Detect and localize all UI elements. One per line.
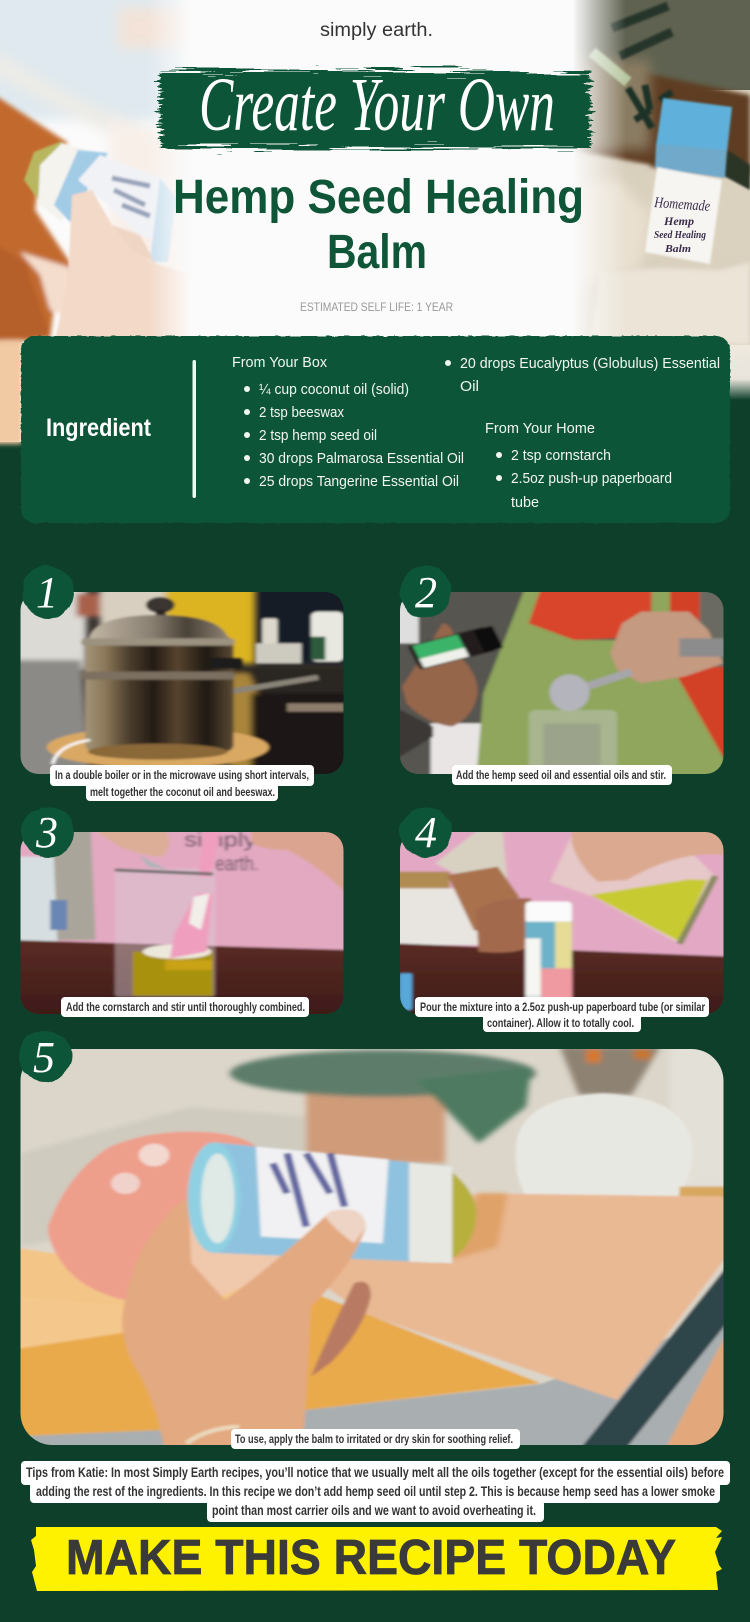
step 3 panel — [10, 806, 354, 1020]
step 3 badge: 3 — [35, 808, 58, 857]
main heading — [173, 171, 584, 279]
yellow brush strip — [31, 1527, 722, 1591]
step 5 caption: To use, apply the balm to irritated or dry skin for soothing relief. — [235, 1432, 513, 1446]
step 3 caption: Add the cornstarch and stir until thoroughly combined. — [66, 1000, 305, 1014]
main heading: Balm — [327, 226, 427, 279]
call to action text: MAKE THIS RECIPE TODAY — [66, 1531, 676, 1585]
tube in photo — [188, 1142, 476, 1263]
title banner — [160, 63, 590, 148]
tips from Katie: point than most carrier oils and we want to avoid overheating it. — [212, 1503, 536, 1518]
from your box list — [232, 354, 720, 490]
brush stroke — [160, 71, 590, 148]
step 1 caption: melt together the coconut oil and beeswax. — [90, 785, 275, 799]
hero tube handwriting — [653, 195, 711, 255]
step 3 badge — [22, 806, 74, 858]
step 4 panel — [392, 806, 732, 1032]
step 2 badge — [400, 566, 452, 618]
from your box list: ¼ cup coconut oil (solid) — [259, 381, 409, 398]
shelf life note: ESTIMATED SELF LIFE: 1 YEAR — [300, 300, 453, 314]
step 1 badge: 1 — [36, 568, 58, 617]
hero right photo — [565, 0, 750, 345]
step 2 caption — [452, 765, 672, 785]
step 1 panel — [10, 566, 354, 801]
step 3 photo: stirring in cornstarch — [20, 832, 344, 1014]
hero tube handwriting: Hemp — [663, 214, 694, 228]
step 5 caption — [231, 1429, 520, 1449]
hero tube handwriting: Balm — [664, 243, 691, 255]
step 1 caption — [50, 765, 314, 801]
divider — [192, 360, 196, 498]
step 4 badge — [400, 806, 452, 858]
step 3 photo: stirring in cornstarch: earth. — [215, 853, 258, 876]
from your box list: Oil — [460, 378, 479, 395]
step 4 badge: 4 — [415, 808, 437, 857]
step 3 photo: stirring in cornstarch: simply — [184, 829, 256, 852]
step 5 panel — [10, 1030, 737, 1453]
tips from Katie — [21, 1461, 730, 1522]
step 5 badge: 5 — [33, 1033, 55, 1082]
from your box list: 20 drops Eucalyptus (Globulus) Essential — [460, 355, 720, 372]
script title: Create Your Own — [199, 63, 555, 147]
from your home list: tube — [511, 494, 539, 511]
main heading: Hemp Seed Healing — [173, 171, 584, 224]
from your home list — [485, 420, 672, 511]
step 4 caption — [415, 997, 709, 1032]
from your box list: 2 tsp hemp seed oil — [259, 427, 377, 444]
step 4 caption: container). Allow it to totally cool. — [487, 1016, 634, 1030]
step 1 badge — [22, 566, 74, 618]
from your box list: 2 tsp beeswax — [259, 404, 344, 421]
step 2 badge: 2 — [415, 568, 437, 617]
from your box list: 25 drops Tangerine Essential Oil — [259, 473, 459, 490]
hero fades — [148, 0, 626, 345]
from your home list: 2 tsp cornstarch — [511, 447, 611, 464]
step 2 panel — [392, 566, 733, 785]
from your home list: 2.5oz push-up paperboard — [511, 470, 672, 487]
hero left photo — [0, 0, 195, 444]
step 1 caption: In a double boiler or in the microwave using short intervals, — [55, 768, 309, 782]
step 5 photo: applying balm on arm — [10, 1043, 737, 1453]
hero tube handwriting: Seed Healing — [654, 229, 706, 241]
step 4 photo: pouring into tube — [400, 832, 724, 1014]
step 3 caption — [61, 997, 309, 1017]
hero tube handwriting: Homemade — [653, 195, 711, 215]
hero header with photos — [0, 0, 750, 444]
from your box list: From Your Box — [232, 354, 327, 371]
ingredient panel — [21, 336, 730, 523]
step 2 photo: pouring hemp seed oil — [400, 592, 724, 774]
from your box list: 30 drops Palmarosa Essential Oil — [259, 450, 464, 467]
step 5 badge — [19, 1030, 71, 1082]
step 1 photo: double boiler — [20, 592, 344, 774]
logo: simply earth. — [320, 20, 433, 41]
from your home list: From Your Home — [485, 420, 595, 437]
call to action banner — [31, 1527, 722, 1591]
step 2 caption: Add the hemp seed oil and essential oils and stir. — [456, 768, 666, 782]
ingredient heading: Ingredient — [46, 414, 152, 442]
